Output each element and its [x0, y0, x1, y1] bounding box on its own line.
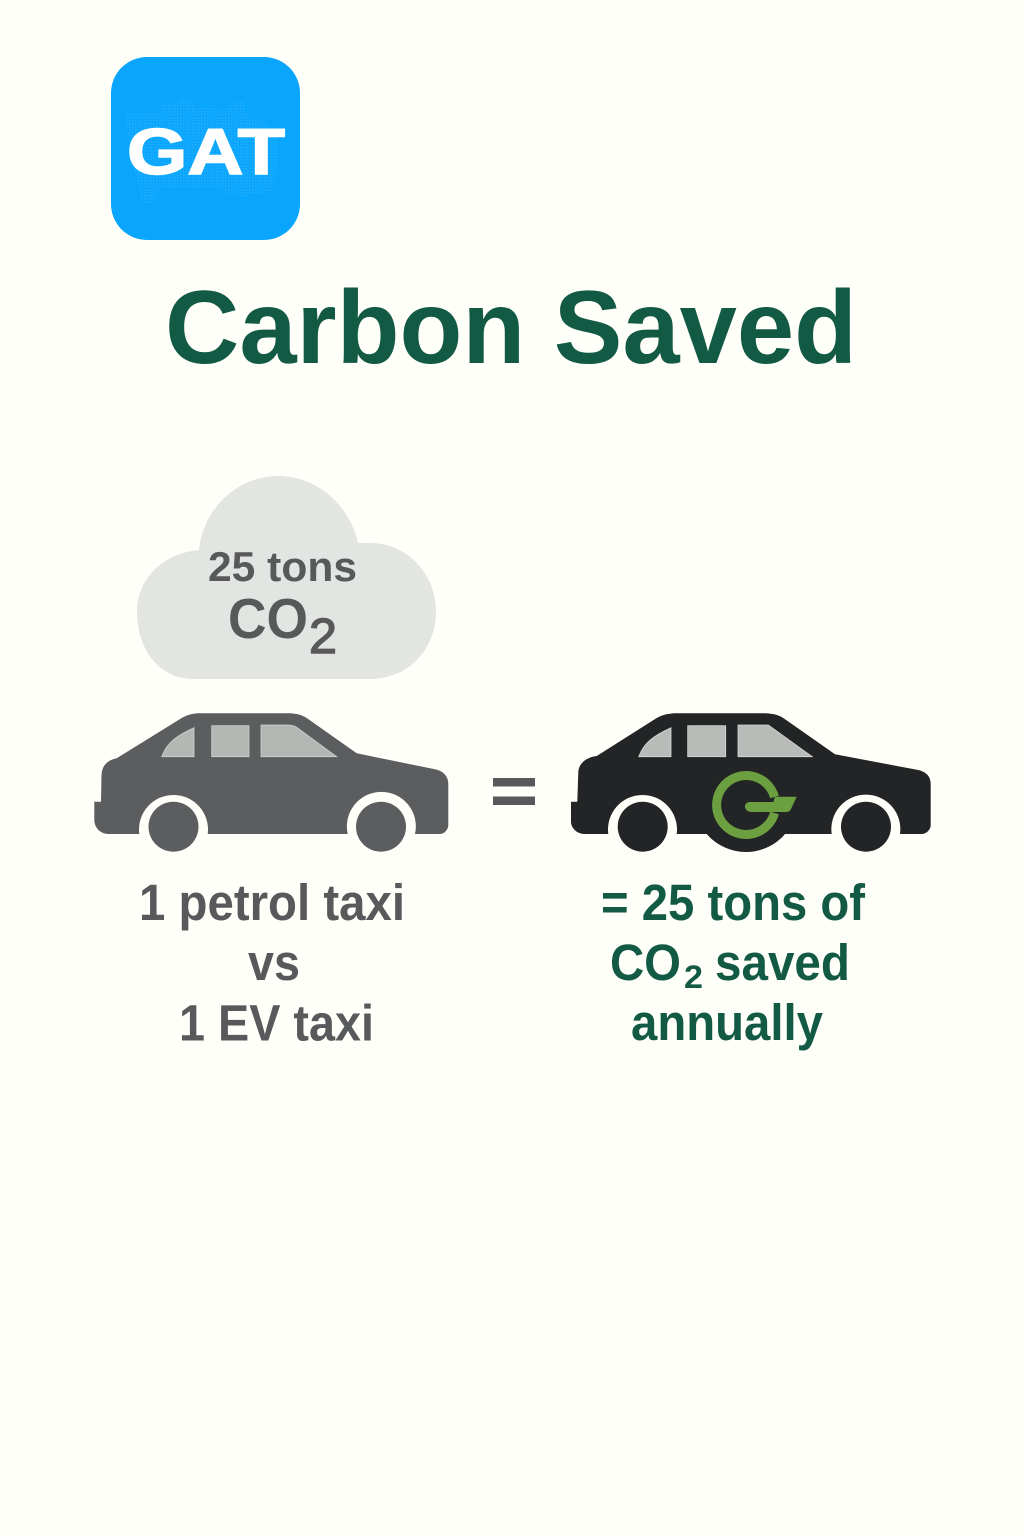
cloud label: CO2: 2 [309, 610, 337, 664]
caption: 25 tons of CO2 saved annually: 2 [684, 959, 703, 995]
logo wordmark: GAT [127, 115, 285, 188]
caption: 25 tons of CO2 saved annually: annually [631, 994, 824, 1051]
logo: GAT app icon [111, 57, 300, 240]
caption: 25 tons of CO2 saved annually: = 25 tons of [601, 874, 866, 931]
caption: 25 tons of CO2 saved annually: CO [610, 934, 681, 991]
caption: petrol vs EV [139, 874, 405, 1052]
cloud: 25 tons CO2 [137, 476, 436, 679]
caption: petrol vs EV: 1 petrol taxi [139, 874, 405, 931]
icon: petrol car [94, 713, 448, 852]
title: Carbon Saved [165, 270, 857, 386]
petrol car windows [162, 725, 337, 757]
cloud label: CO2 [228, 587, 337, 664]
caption: petrol vs EV: vs [248, 934, 300, 991]
caption: 25 tons of CO2 saved annually: saved [715, 934, 850, 991]
electric car wheels [618, 802, 891, 852]
icon: equals sign [493, 778, 535, 805]
icon: electric car [571, 713, 931, 852]
cloud label: CO2: CO [228, 587, 308, 651]
icon: green power arrow badge [717, 776, 797, 835]
caption: 25 tons of CO2 saved annually [601, 874, 866, 1051]
petrol car wheels [148, 802, 406, 852]
caption: petrol vs EV: 1 EV taxi [179, 994, 374, 1052]
electric car windows [639, 725, 812, 757]
cloud label: 25 tons: 25 tons [208, 543, 357, 590]
